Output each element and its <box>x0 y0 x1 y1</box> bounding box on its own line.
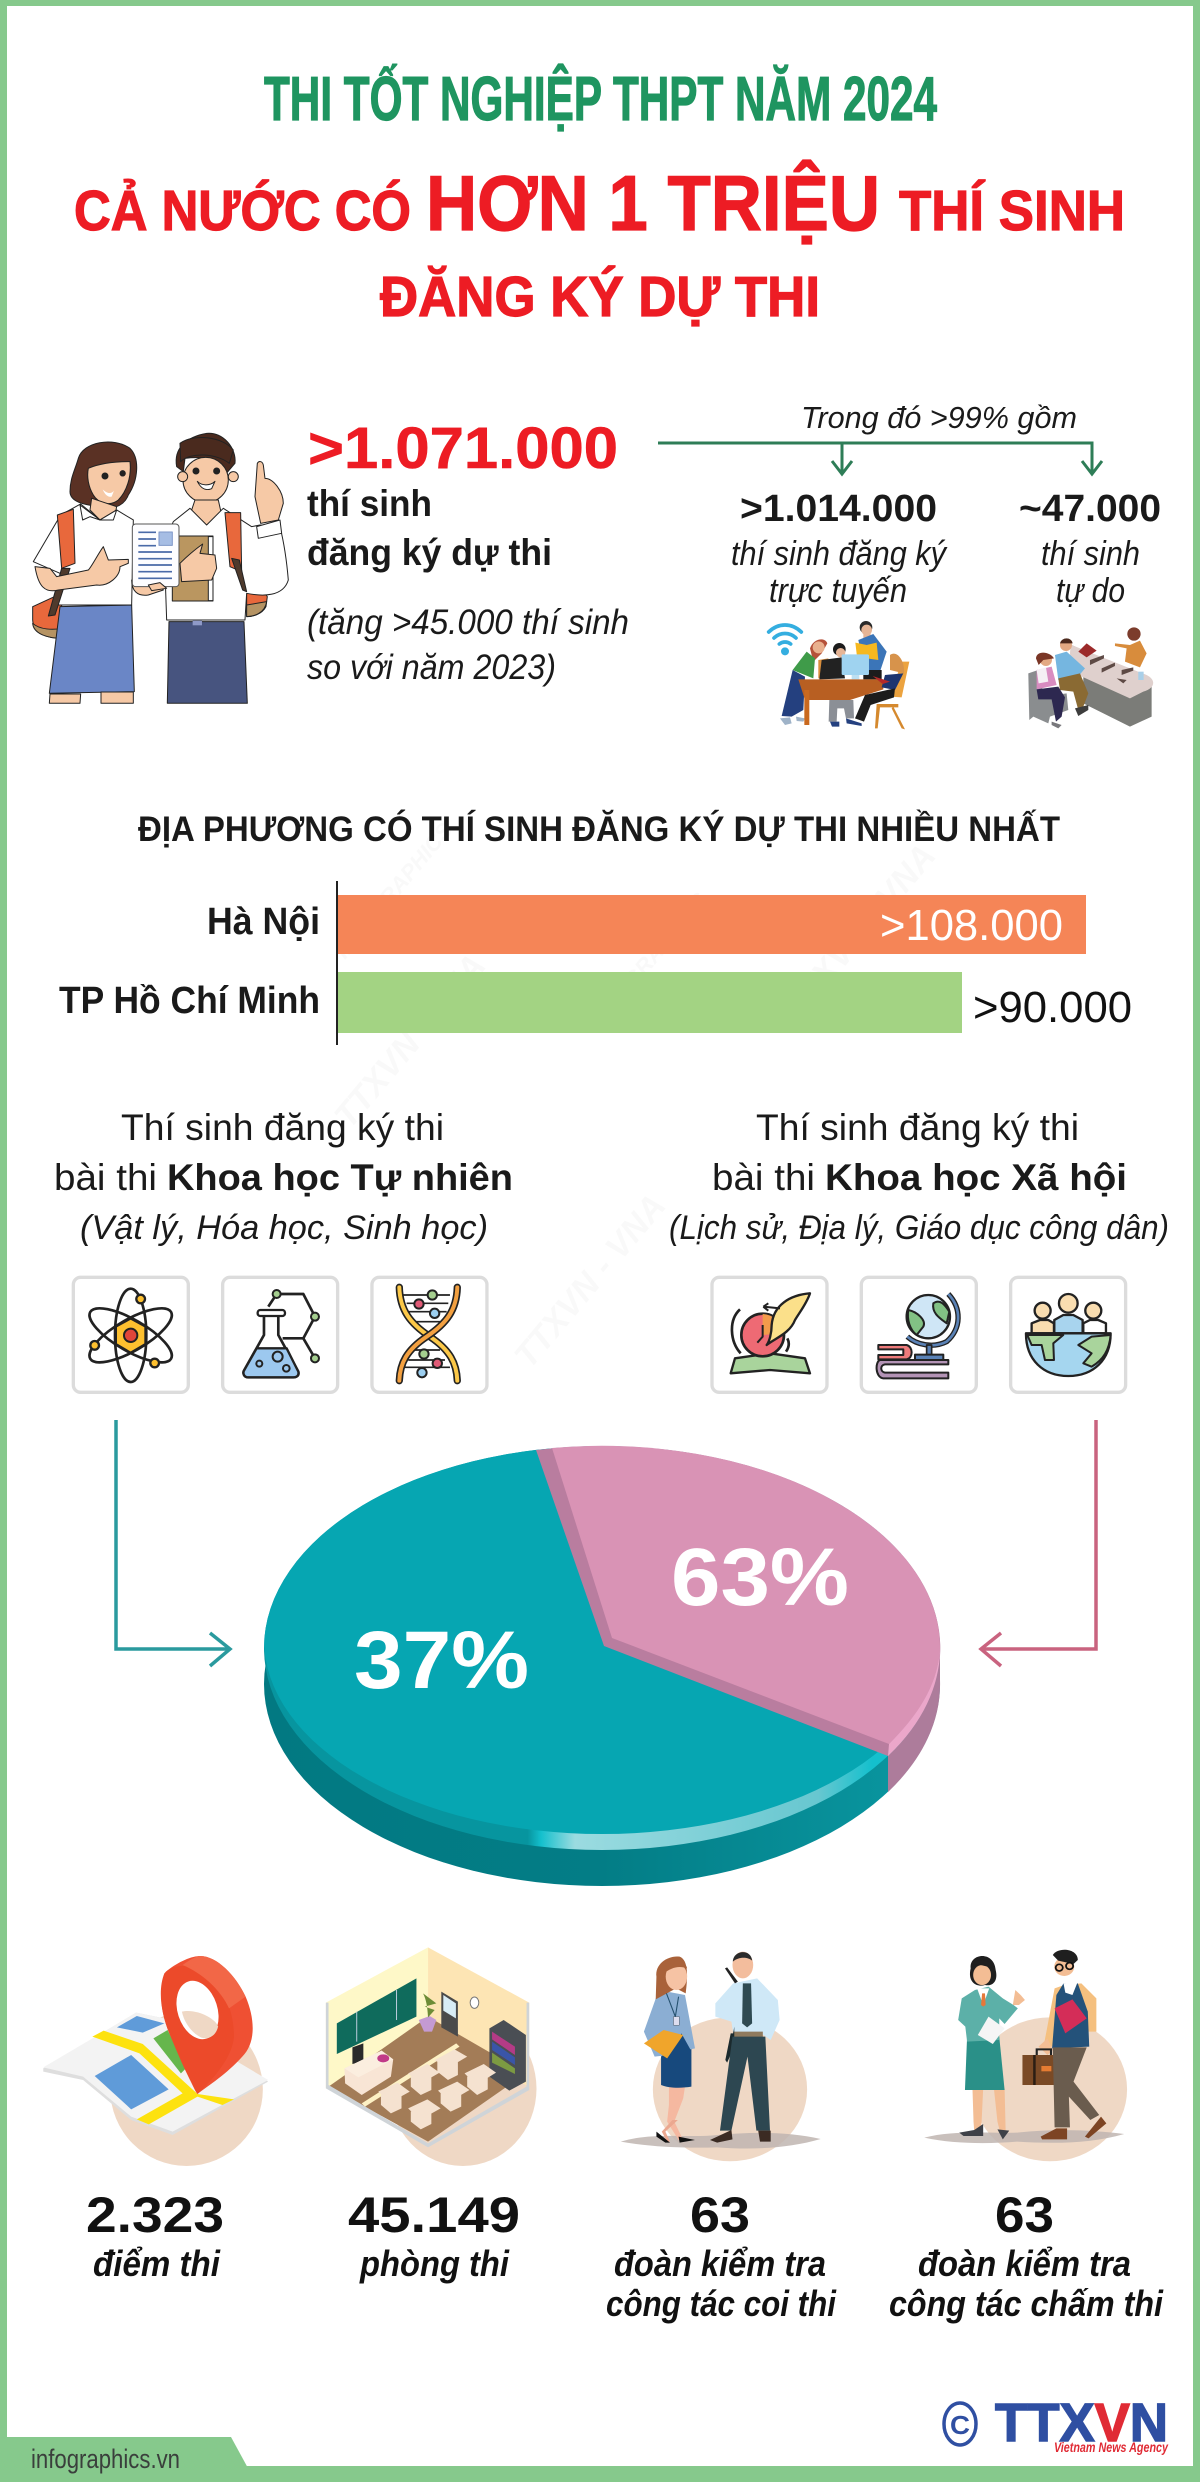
icon: classroom <box>326 1947 537 2166</box>
label: 63 percent: 63% <box>671 1532 849 1623</box>
logo: TTXVN: TTXVN <box>995 2393 1168 2453</box>
freelance candidates: tự do <box>1056 572 1125 610</box>
footer tab: infographics.vn: infographics.vn <box>31 2444 180 2474</box>
watermarks: INFOGRAPHICS <box>825 1418 952 1563</box>
bar: TP HCM <box>59 972 1132 1033</box>
increase note: so với năm 2023) <box>307 648 556 687</box>
heading: social sciences: bài thi <box>712 1157 815 1198</box>
bar chart: top localities <box>59 881 1132 1045</box>
bar: Ha Noi <box>207 895 1086 954</box>
title: headline: ĐĂNG KÝ DỰ THI <box>380 264 820 329</box>
pie side <box>264 1482 940 1886</box>
title: headline: HƠN 1 TRIỆU <box>426 159 880 247</box>
title: headline <box>74 159 1125 329</box>
heading: natural sciences: bài thi <box>54 1157 157 1198</box>
footer tab: infographics.vn <box>0 2437 249 2474</box>
text: grading inspectors: công tác chấm thi <box>889 2283 1164 2324</box>
text: exam rooms: phòng thi <box>359 2243 510 2284</box>
bar: Ha Noi: >108.000 <box>880 901 1063 950</box>
heading: social sciences <box>669 1107 1169 1247</box>
icon: atom <box>73 1277 188 1392</box>
icon: exam sites map pin <box>43 1956 268 2166</box>
arrow: social sciences to pie <box>981 1420 1096 1666</box>
bar: Ha Noi: Hà Nội <box>207 901 320 943</box>
text: exam sites <box>86 2187 224 2284</box>
freelance candidates: ~47.000 <box>1019 488 1161 530</box>
bar: TP HCM: >90.000 <box>973 983 1132 1032</box>
logo: TTXVN: Vietnam News Agency <box>1054 2439 1169 2455</box>
watermarks <box>327 818 952 1593</box>
watermarks: TTXVN - VNA <box>507 1187 673 1375</box>
text: exam rooms: 45.149 <box>348 2187 520 2243</box>
heading: social sciences: Khoa học Xã hội <box>825 1157 1127 1198</box>
icon: group online with wifi <box>769 621 909 729</box>
watermarks: INFOGRAPHICS <box>330 818 457 963</box>
title: headline: CẢ NƯỚC CÓ <box>74 178 411 243</box>
bar: TP HCM: TP Hồ Chí Minh <box>59 980 320 1022</box>
heading: natural sciences: Thí sinh đăng ký thi <box>121 1107 444 1148</box>
icon: dna <box>372 1277 487 1392</box>
online registrants <box>731 488 948 610</box>
heading: natural sciences: Khoa học Tự nhiên <box>167 1157 513 1198</box>
total label <box>307 483 552 573</box>
breakdown note: Trong đó >99% gồm <box>801 400 1077 435</box>
arrow: natural sciences to pie <box>116 1420 230 1666</box>
freelance candidates: thí sinh <box>1041 535 1140 573</box>
text: invigilation inspectors <box>606 2187 837 2324</box>
text: grading inspectors: 63 <box>995 2187 1054 2243</box>
heading: natural sciences: (Vật lý, Hóa học, Sinh học) <box>80 1209 488 1247</box>
total label: đăng ký dự thi <box>307 532 552 573</box>
heading: localities: ĐỊA PHƯƠNG CÓ THÍ SINH ĐĂNG KÝ DỰ THI NHIỀU NHẤT <box>138 809 1060 849</box>
logo: TTXVN: C <box>950 2410 970 2440</box>
icon: grading inspectors <box>924 1950 1127 2161</box>
heading: social sciences: (Lịch sử, Địa lý, Giáo dục công dân) <box>669 1209 1169 1247</box>
online registrants: trực tuyến <box>769 572 907 610</box>
label: 37 percent: 37% <box>354 1615 529 1706</box>
icon: history <box>712 1277 827 1392</box>
text: exam rooms <box>348 2187 520 2284</box>
text: exam sites: 2.323 <box>86 2187 224 2243</box>
illustration: two students <box>33 433 288 703</box>
icon: invigilation inspectors <box>621 1952 821 2161</box>
total label: thí sinh <box>307 483 432 524</box>
freelance candidates <box>1019 488 1161 610</box>
title: headline: THÍ SINH <box>899 179 1125 243</box>
online registrants: thí sinh đăng ký <box>731 535 948 573</box>
pie top: 63 percent pink <box>536 1446 940 1756</box>
icon: candidates at counter <box>1028 627 1153 728</box>
icons: natural science subjects <box>73 1277 487 1392</box>
pie top: 37 percent teal <box>264 1446 940 1850</box>
watermarks: TTXVN - VNA <box>777 837 943 1025</box>
heading: social sciences: Thí sinh đăng ký thi <box>756 1107 1079 1148</box>
icon: globe <box>861 1277 976 1392</box>
text: invigilation inspectors: đoàn kiểm tra <box>614 2243 826 2284</box>
increase note: (tăng >45.000 thí sinh <box>307 603 629 642</box>
breakdown arrows <box>658 443 1102 474</box>
total registered figure: >1.071.000 <box>308 416 618 481</box>
icon: flask <box>223 1277 338 1392</box>
text: grading inspectors: đoàn kiểm tra <box>918 2243 1131 2284</box>
text: exam sites: điểm thi <box>93 2243 221 2284</box>
online registrants: >1.014.000 <box>740 488 937 530</box>
text: invigilation inspectors: 63 <box>690 2187 750 2243</box>
pie chart <box>264 1446 940 1886</box>
increase note <box>307 603 629 687</box>
icon: people on earth <box>1011 1277 1126 1392</box>
text: invigilation inspectors: công tác coi thi <box>606 2283 837 2324</box>
watermarks: INFOGRAPHICS <box>495 1448 622 1593</box>
heading: natural sciences <box>54 1107 513 1247</box>
icons: social science subjects <box>712 1277 1126 1392</box>
text: grading inspectors <box>889 2187 1164 2324</box>
watermarks: INFOGRAPHICS <box>585 888 712 1033</box>
watermarks: TTXVN - VNA <box>327 947 493 1135</box>
